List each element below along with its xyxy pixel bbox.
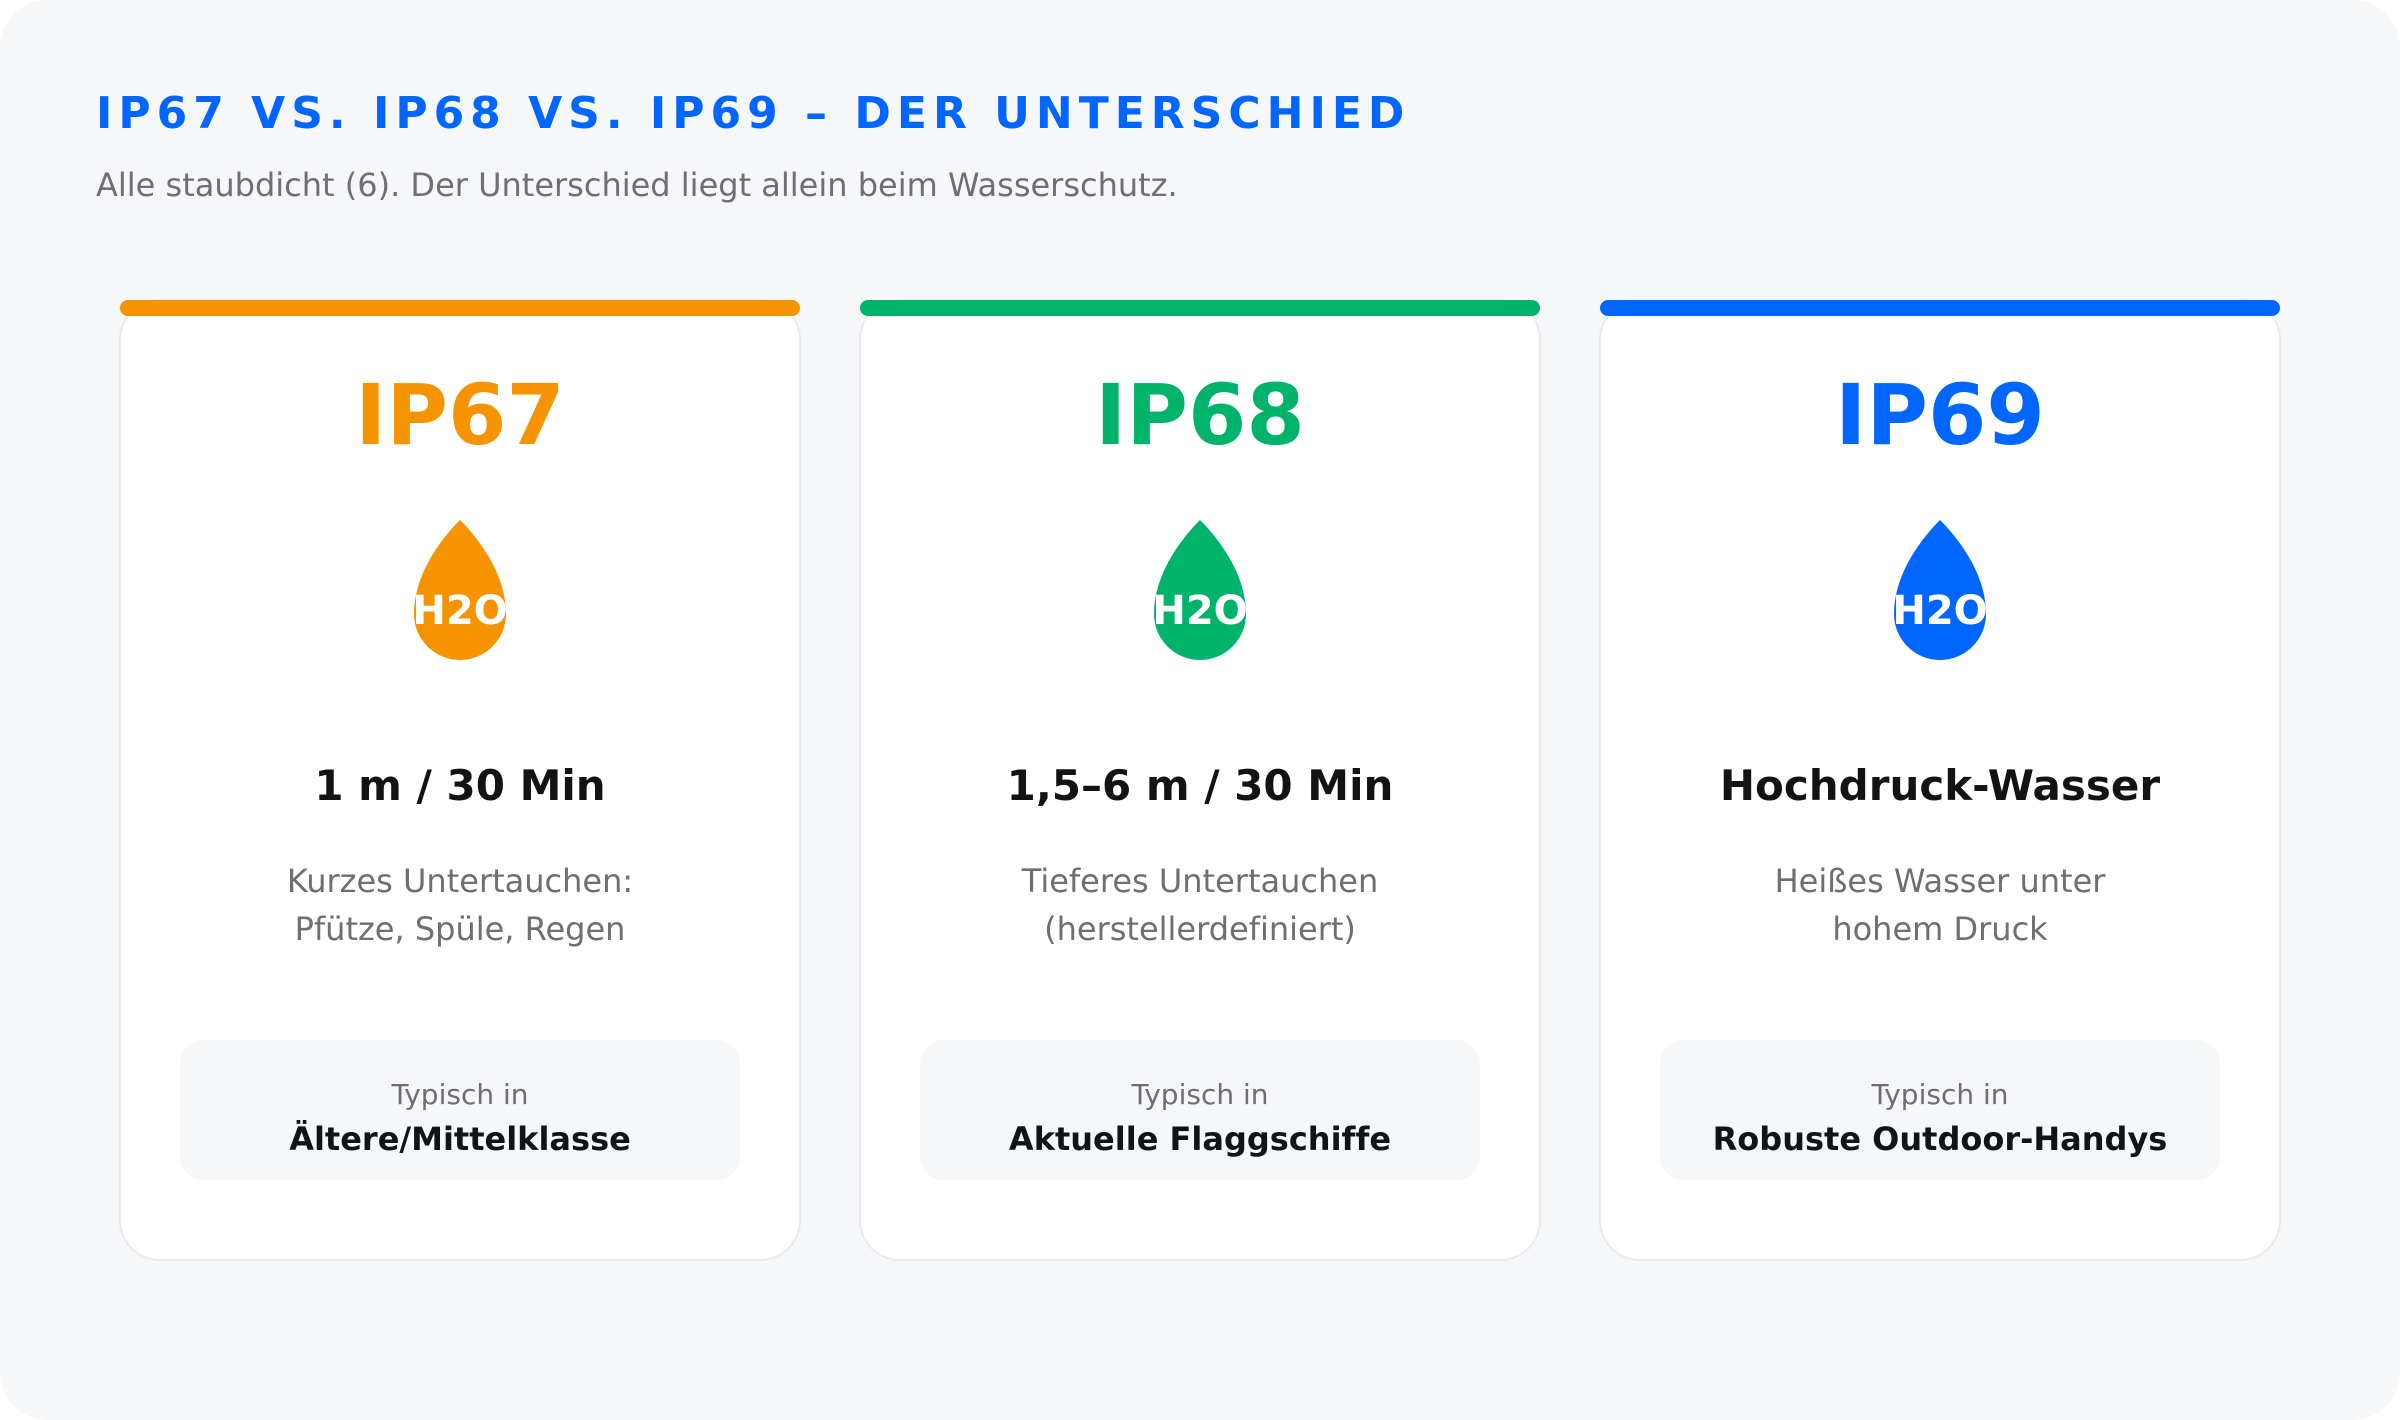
- typical devices box: Ältere/Mittelklasse: [289, 1120, 631, 1158]
- description: Heißes Wasser unter: [1775, 862, 2106, 900]
- title: IP67 VS. IP68 VS. IP69 – DER UNTERSCHIED: [96, 88, 1410, 139]
- subtitle: Alle staubdicht (6). Der Unterschied liegt allein beim Wasserschutz.: [96, 166, 1178, 204]
- icon: water drop: [412, 520, 508, 660]
- card background: [120, 300, 800, 1260]
- depth metric: 1,5–6 m / 30 Min: [1007, 761, 1393, 810]
- card background: [860, 300, 1540, 1260]
- typical devices box: Typisch in: [1130, 1078, 1269, 1111]
- card background: [1600, 300, 2280, 1260]
- description: Kurzes Untertauchen:: [287, 862, 633, 900]
- rating heading: IP68: [1095, 366, 1305, 464]
- depth metric: 1 m / 30 Min: [314, 761, 606, 810]
- icon: water drop: H2O: [1152, 588, 1248, 634]
- accent bar: [120, 300, 800, 316]
- typical devices box: [1660, 1040, 2220, 1180]
- icon: water drop: [1152, 520, 1248, 660]
- description: hohem Druck: [1832, 910, 2048, 948]
- typical devices box: Aktuelle Flaggschiffe: [1009, 1120, 1391, 1158]
- panel: IP69: [1600, 300, 2280, 1260]
- description: Tieferes Untertauchen: [1021, 862, 1378, 900]
- typical devices box: Robuste Outdoor-Handys: [1713, 1120, 2167, 1158]
- rating heading: IP69: [1835, 366, 2045, 464]
- description: (herstellerdefiniert): [1044, 910, 1356, 948]
- icon: water drop: H2O: [412, 588, 508, 634]
- typical devices box: [180, 1040, 740, 1180]
- accent bar: [1600, 300, 2280, 316]
- typical devices box: Typisch in: [390, 1078, 529, 1111]
- accent bar: [860, 300, 1540, 316]
- panel: IP68: [860, 300, 1540, 1260]
- rating heading: IP67: [355, 366, 565, 464]
- pressure metric: Hochdruck-Wasser: [1720, 761, 2160, 810]
- typical devices box: [920, 1040, 1480, 1180]
- icon: water drop: H2O: [1892, 588, 1988, 634]
- description: Pfütze, Spüle, Regen: [295, 910, 625, 948]
- typical devices box: Typisch in: [1870, 1078, 2009, 1111]
- panel: IP67: [120, 300, 800, 1260]
- icon: water drop: [1892, 520, 1988, 660]
